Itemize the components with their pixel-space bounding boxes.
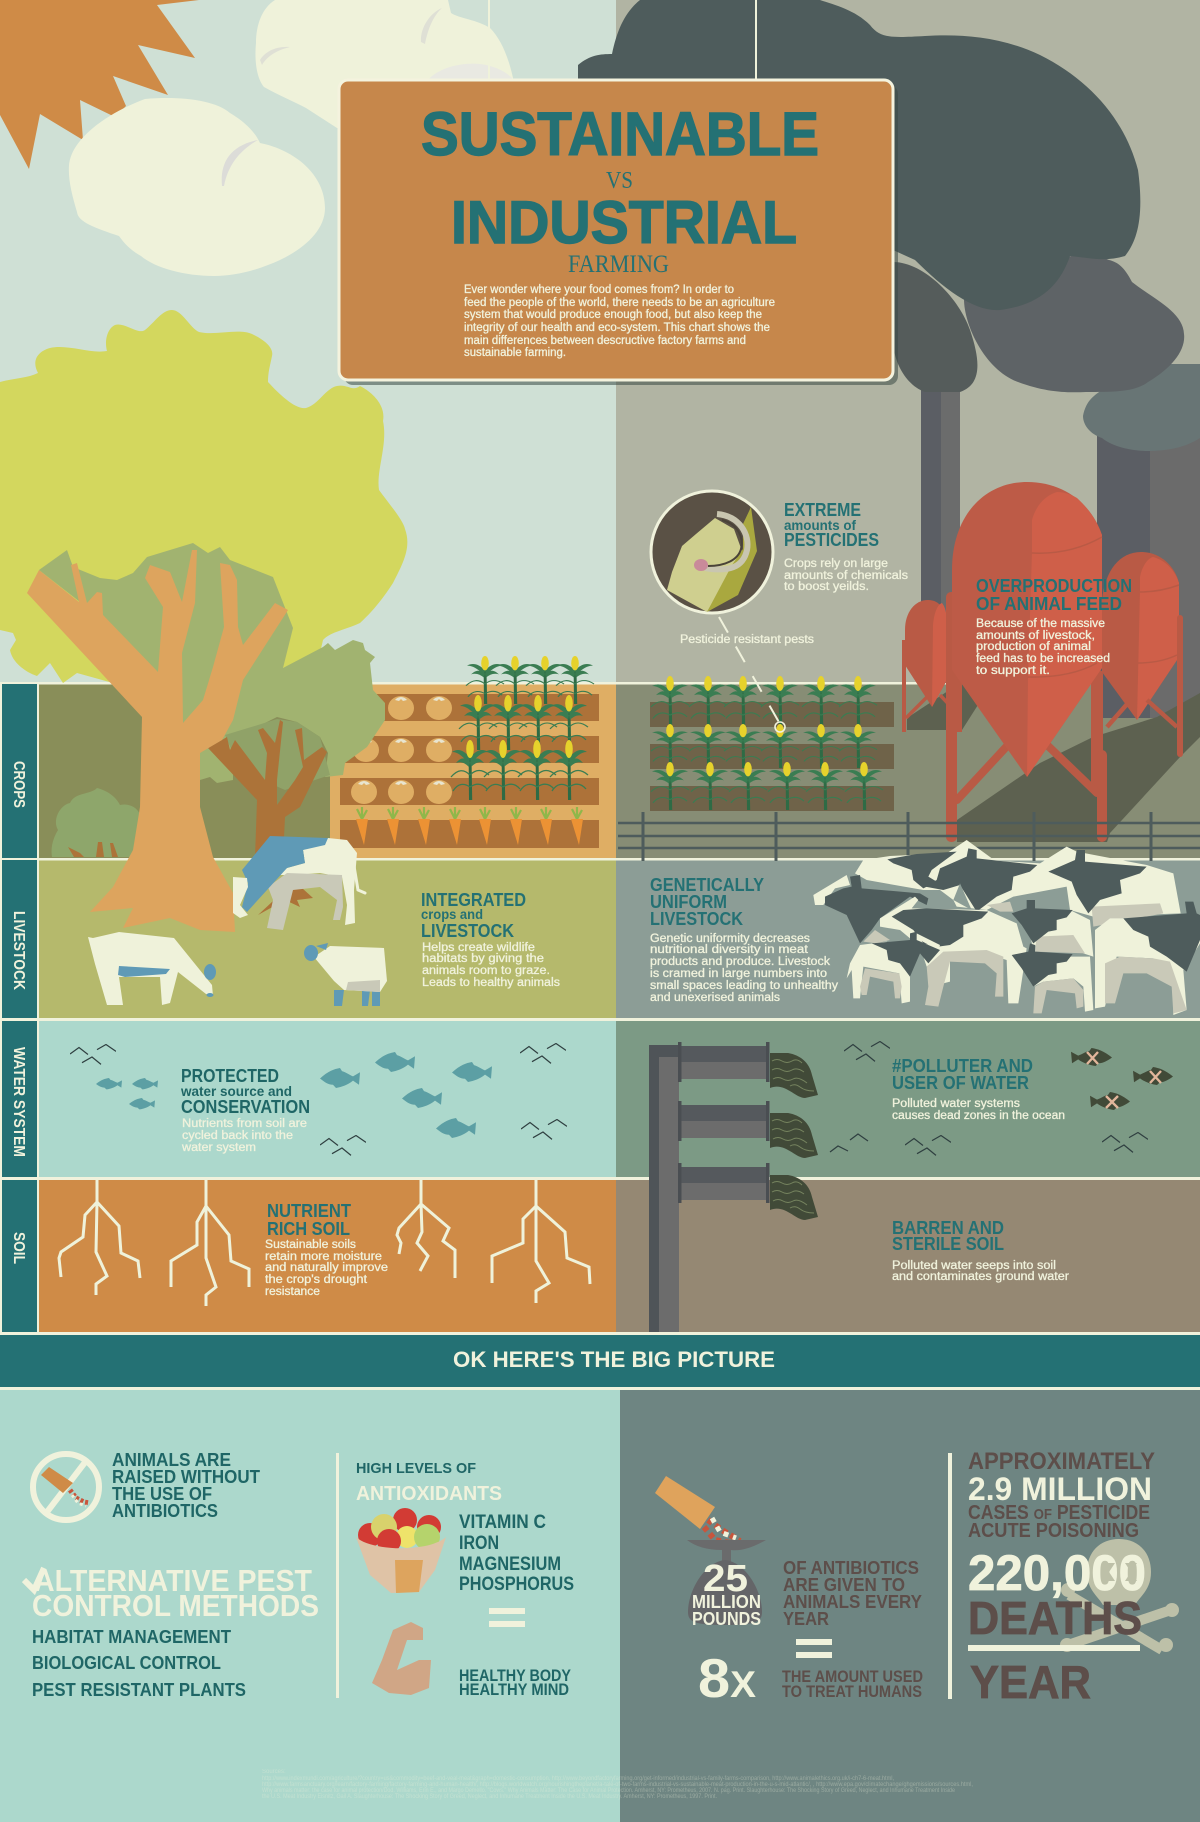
icon: skull and crossbones: [1060, 1539, 1179, 1652]
stat: pesticide poisoning: CASES OF PESTICIDE: [968, 1502, 1150, 1524]
stat: pesticide poisoning: YEAR: [970, 1656, 1091, 1708]
icon: pig: [88, 932, 216, 1005]
text: healthy body healthy mind: HEALTHY BODY: [459, 1666, 572, 1685]
cow: lower calf: [1012, 943, 1093, 1013]
background: sustainable sky: [0, 0, 616, 684]
icon: bush: [52, 788, 140, 857]
intro text: feed the people of the world, there needs to be an agriculture: [464, 297, 775, 309]
banner: the big picture: [0, 1335, 1200, 1387]
text: barren and sterile soil: and contaminates ground water: [892, 1271, 1069, 1283]
text: polluter and user of water: [892, 1056, 1065, 1122]
list: pest control methods: BIOLOGICAL CONTROL: [32, 1653, 221, 1673]
text: animals without antibiotics: ANIMALS ARE: [112, 1450, 231, 1470]
title: farming: FARMING: [568, 251, 669, 278]
stat: 8x: 8X: [698, 1647, 756, 1709]
stat: pesticide poisoning: DEATHS: [968, 1592, 1142, 1644]
text: genetically uniform livestock: [650, 875, 838, 1004]
title: industrial: INDUSTRIAL: [451, 189, 797, 256]
text: sources: Why animals matter: the case for animal protection/Dod. Williams, Erin E., and Margo Demello. "Cows." Why Animals Matter: The Case for Animal Protection. Amherst, NY: Prometheus, 2007. N. pag. Print. Slaughterhouse: The Shocking Story of Greed, Neglect, and Inhumane Treatment Inside: [262, 1788, 956, 1794]
list: nutrients: MAGNESIUM: [459, 1554, 561, 1575]
icon: main tree canopy: [0, 310, 407, 690]
text: barren and sterile soil: [892, 1218, 1069, 1283]
text: genetically uniform livestock: nutritional diversity in meat: [650, 944, 809, 956]
stat: 25 million pounds: POUNDS: [692, 1609, 761, 1629]
pest leader line: [719, 617, 785, 732]
panel: water sustainable: [39, 1021, 616, 1177]
text: polluter and user of water: causes dead zones in the ocean: [892, 1110, 1065, 1122]
stat: pesticide poisoning: 2.9 MILLION: [968, 1471, 1152, 1507]
text: nutrient rich soil: and naturally improve: [265, 1262, 388, 1274]
icon: pill bottle and scale: [655, 1476, 766, 1625]
text: protected water source: cycled back into the: [182, 1130, 293, 1142]
text: sources: the U.S. Meat Industry Eisnitz, Gail A. Slaughterhouse: The Shocking Story of Greed, Neglect, and Inhumane Treatment Inside the U.S. Meat Industry. Amherst, NY: Prometheus, 1997. Print.: [262, 1794, 717, 1800]
text: extreme amounts of pesticides: PESTICIDES: [784, 530, 879, 550]
onions: [351, 696, 452, 804]
cow: upper calf: [1012, 900, 1093, 957]
text: high levels of antioxidants: HIGH LEVELS OF: [356, 1460, 476, 1477]
text: extreme amounts of pesticides: amounts of: [784, 517, 856, 533]
text: nutrient rich soil: Sustainable soils: [265, 1239, 356, 1251]
main tree inner foliage: [39, 543, 293, 723]
text: polluter and user of water: Polluted water systems: [892, 1098, 1020, 1110]
text: nutrient rich soil: RICH SOIL: [267, 1219, 350, 1239]
icon: sheep: [304, 943, 387, 1006]
text: overproduction of animal feed: OF ANIMAL FEED: [976, 594, 1122, 614]
panel: bottom left: [0, 1390, 620, 1822]
corn plants: [451, 656, 594, 800]
intro text: integrity of our health and eco-system. This chart shows the: [464, 322, 770, 334]
stat: 25 million pounds: 25: [703, 1558, 748, 1600]
text: nutrient rich soil: NUTRIENT: [267, 1201, 351, 1221]
icon: main tree trunk: [27, 550, 288, 932]
text: sources: http://www.farmsanctuary.org/learn/factory-farming/factory-farming-and-human-health/, http://blogs.worldwatch.org/nourishingtheplanet/a-tale-of-two-farms-industrial-vs-sustainable-meat-production-in-the-u-s-mid-atlantic/, , http://www.epa.gov/climatechange/ghgemissions/sources.html,: [262, 1782, 973, 1788]
text: polluter and user of water: #POLLUTER AND: [892, 1056, 1033, 1076]
text: protected water source: water system: [181, 1142, 256, 1154]
text: polluter and user of water: USER OF WATER: [892, 1073, 1029, 1093]
text: animals without antibiotics: THE USE OF: [112, 1484, 212, 1504]
icon: fruit basket: [356, 1508, 446, 1593]
text: nutrient rich soil: resistance: [265, 1286, 320, 1298]
intro text: sustainable farming.: [464, 347, 566, 359]
smoke: third plume: [1083, 364, 1200, 451]
text: protected water source: [180, 1066, 310, 1154]
icon: equals left: [489, 1608, 525, 1627]
text: genetically uniform livestock: LIVESTOCK: [650, 909, 743, 929]
list: nutrients: IRON: [459, 1533, 499, 1554]
stat: 25 million pounds: MILLION: [692, 1592, 761, 1612]
text: amount used to treat humans: [782, 1667, 923, 1701]
intro text: main differences between descructive factory farms and: [464, 335, 746, 347]
text: animals without antibiotics: ANTIBIOTICS: [112, 1501, 218, 1521]
text: overproduction of animal feed: production of animal: [976, 641, 1091, 653]
heading: alternative pest control: ALTERNATIVE PEST: [34, 1563, 312, 1598]
text: integrated crops and livestock: habitats by giving the: [422, 953, 544, 965]
text: of antibiotics given: OF ANTIBIOTICS: [783, 1558, 919, 1578]
panel: crops industrial: [616, 684, 1200, 858]
birds: polluted water: [830, 1042, 1148, 1155]
text: barren and sterile soil: STERILE SOIL: [892, 1234, 1004, 1254]
panel: soil sustainable: [39, 1180, 616, 1332]
fence: [618, 812, 1200, 861]
cow: right: [1095, 902, 1200, 1015]
text: integrated crops and livestock: crops and: [421, 906, 483, 922]
icon: pesticide worm on corn: [651, 491, 773, 613]
icon: equals right: [796, 1639, 832, 1658]
icon: right small silo: [1102, 552, 1183, 757]
stat: pesticide poisoning: APPROXIMATELY: [968, 1448, 1155, 1475]
text: high levels of antioxidants: ANTIOXIDANTS: [356, 1483, 502, 1505]
text: protected water source: CONSERVATION: [181, 1097, 310, 1117]
banner: the big picture: OK HERE'S THE BIG PICTURE: [453, 1347, 775, 1372]
panel: crops sustainable forest: [39, 684, 330, 858]
text: overproduction of animal feed: Because of the massive: [976, 618, 1105, 630]
text: overproduction of animal feed: [976, 576, 1132, 677]
icon: cow sustainable: [233, 836, 365, 930]
heading: alternative pest control: CONTROL METHODS: [32, 1588, 319, 1623]
text: genetically uniform livestock: and unexerised animals: [650, 992, 780, 1004]
skull eyes: [1103, 1563, 1137, 1581]
panel: livestock industrial: [616, 860, 1200, 1018]
panel: crops sustainable field: [330, 684, 616, 858]
smoke: big dark plume: [578, 0, 1140, 310]
text: extreme amounts of pesticides: EXTREME: [784, 500, 861, 520]
text: integrated crops and livestock: animals room to graze.: [422, 965, 550, 977]
text: integrated crops and livestock: [421, 890, 560, 989]
text: genetically uniform livestock: is cramed in large numbers into: [650, 968, 827, 980]
hanging strings: [489, 0, 756, 80]
text: of antibiotics given: ARE GIVEN TO: [783, 1575, 905, 1595]
panel: soil industrial: [616, 1180, 1200, 1332]
text: protected water source: water source and: [180, 1083, 292, 1099]
panel: title sign: [339, 80, 898, 385]
text: integrated crops and livestock: INTEGRATED: [421, 890, 526, 910]
text: nutrient rich soil: retain more moisture: [265, 1251, 382, 1263]
text: healthy body healthy mind: HEALTHY MIND: [459, 1680, 569, 1699]
icon: cloud left: [69, 98, 325, 276]
heading: alternative pest control: [32, 1563, 319, 1623]
text: of antibiotics given: [783, 1558, 922, 1629]
list: nutrients: PHOSPHORUS: [459, 1574, 574, 1595]
crop beds: sustainable: [340, 656, 599, 848]
trunk shadow: [258, 888, 313, 915]
text: extreme amounts of pesticides: Crops rely on large: [784, 558, 888, 570]
background: industrial sky: [616, 0, 1200, 684]
text: healthy body healthy mind: [459, 1666, 572, 1699]
text: extreme amounts of pesticides: to boost yeilds.: [784, 581, 869, 593]
icon: cloud top: [255, 0, 515, 132]
text: animals without antibiotics: RAISED WITHOUT: [112, 1467, 260, 1487]
divider right: [948, 1453, 952, 1699]
title: sustainable: SUSTAINABLE: [421, 100, 819, 168]
text: high levels of antioxidants: [356, 1460, 502, 1505]
icon: left small silo: [902, 600, 962, 732]
text: integrated crops and livestock: Leads to healthy animals: [422, 977, 560, 989]
list: pest control methods: PEST RESISTANT PLANTS: [32, 1680, 246, 1700]
herd of holstein cows: [813, 840, 1200, 1015]
text: nutrient rich soil: the crop's drought: [265, 1274, 368, 1286]
icon: sun: [0, 0, 199, 169]
text: overproduction of animal feed: feed has to be increased: [976, 653, 1110, 665]
icon: dead fish: [1071, 1048, 1173, 1110]
stat: pesticide poisoning: 220,000: [968, 1545, 1146, 1601]
intro text: system that would produce enough food, but also keep the: [464, 309, 762, 321]
carrots: [356, 807, 583, 845]
list: nutrients: VITAMIN C: [459, 1512, 546, 1533]
text: amount used to treat humans: THE AMOUNT USED: [782, 1667, 923, 1686]
text: overproduction of animal feed: amounts of livestock,: [976, 630, 1095, 642]
text: genetically uniform livestock: GENETICALLY: [650, 875, 764, 895]
text: integrated crops and livestock: LIVESTOCK: [421, 921, 514, 941]
text: protected water source: Nutrients from soil are: [182, 1118, 307, 1130]
tab: crops: CROPS: [10, 761, 27, 808]
crop beds: industrial: [650, 676, 894, 811]
stat: 25 million pounds: [692, 1558, 761, 1629]
smoke: middle plume: [964, 255, 1184, 392]
text: genetically uniform livestock: UNIFORM: [650, 892, 727, 912]
text: amount used to treat humans: TO TREAT HUMANS: [782, 1682, 922, 1701]
tab: water system: WATER SYSTEM: [10, 1047, 27, 1157]
label: pesticide resistant pests: Pesticide resistant pests: [680, 634, 814, 646]
list: pest control methods: HABITAT MANAGEMENT: [32, 1627, 231, 1647]
text: protected water source: PROTECTED: [181, 1066, 279, 1086]
text: overproduction of animal feed: to support it.: [976, 665, 1050, 677]
cow: left: [813, 875, 928, 943]
icon: checkmark: [24, 1568, 44, 1590]
panel: water industrial: [616, 1021, 1200, 1177]
tab: livestock: LIVESTOCK: [10, 911, 27, 990]
text: of antibiotics given: YEAR: [783, 1609, 829, 1629]
divider left: [336, 1453, 339, 1698]
stat: pesticide poisoning: [968, 1448, 1155, 1708]
icon: flexed arm: [372, 1622, 431, 1695]
icon: polluting pipes: [649, 1042, 818, 1332]
birds and fish: protected water: [70, 1044, 567, 1155]
icon: no antibiotics: [33, 1454, 99, 1520]
text: overproduction of animal feed: OVERPRODUCTION: [976, 576, 1132, 596]
list: pest control methods: [32, 1627, 246, 1700]
icon: small tree trunk: [208, 720, 327, 858]
cow: centre front: [880, 897, 1027, 1007]
text: barren and sterile soil: Polluted water seeps into soil: [892, 1260, 1056, 1272]
text: sources: Sources:: [262, 1769, 286, 1775]
text: of antibiotics given: ANIMALS EVERY: [783, 1592, 922, 1612]
intro text: [464, 284, 775, 359]
silo ground shadow: [907, 683, 1200, 842]
text: nutrient rich soil: [265, 1201, 388, 1298]
panel: livestock sustainable: [39, 860, 616, 1018]
text: genetically uniform livestock: products and produce. Livestock: [650, 956, 830, 968]
text: animals without antibiotics: [112, 1450, 260, 1521]
list: nutrients: [459, 1512, 574, 1595]
factory chimneys: [921, 385, 1200, 718]
text: sources: [262, 1769, 973, 1800]
panel: bottom right: [620, 1390, 1200, 1822]
intro text: Ever wonder where your food comes from? In order to: [464, 284, 734, 296]
icon: small tree canopy: [200, 640, 385, 783]
stat: pesticide poisoning: ACUTE POISONING: [968, 1520, 1139, 1542]
text: barren and sterile soil: BARREN AND: [892, 1218, 1004, 1238]
text: genetically uniform livestock: Genetic uniformity decreases: [650, 933, 810, 945]
small tree inner foliage: [225, 719, 330, 790]
icon: big silo: [946, 482, 1107, 842]
text: genetically uniform livestock: small spaces leading to unhealthy: [650, 980, 838, 992]
tab: soil: SOIL: [10, 1232, 27, 1264]
text: sources: http://www.indexmundi.com/agriculture/?country=us&commodity=beef-and-veal-meat&graph=domestic-consumption, http://www.beyondfactoryfarming.org/get-informed/industrial-vs-family-farms-comparison, http://www.animalethics.org.uk/i-ch7-6-meat.html,: [262, 1776, 894, 1782]
cream row separators: [0, 682, 1200, 1335]
cow: small left: [847, 932, 940, 1003]
text: integrated crops and livestock: Helps create wildlife: [422, 942, 535, 954]
smoke: rear plume: [893, 262, 977, 392]
text: extreme amounts of pesticides: [784, 500, 908, 593]
roots: [59, 1180, 590, 1306]
text: extreme amounts of pesticides: amounts of chemicals: [784, 570, 908, 582]
left tabs: [2, 684, 37, 1332]
title: vs: VS: [606, 168, 633, 194]
